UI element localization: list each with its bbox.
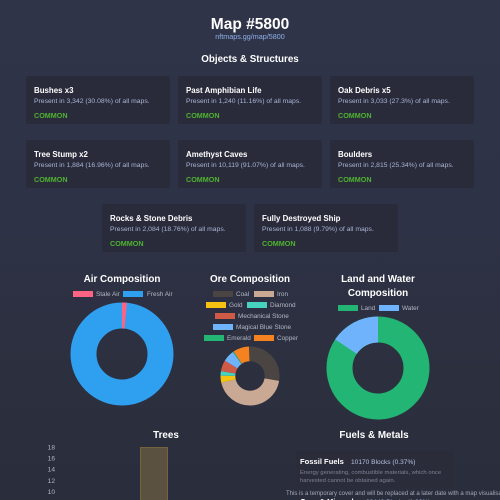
card: rocks and stone debris: Present in 2,084 (18.76%) of all maps. <box>110 226 226 232</box>
ore legend: Coal <box>236 291 249 298</box>
card: past amphibian life: COMMON <box>186 110 220 120</box>
ore legend: Emerald <box>227 335 251 342</box>
card: boulders: Boulders <box>338 150 372 159</box>
card: bushes: Present in 3,342 (30.08%) of all maps. <box>34 98 150 104</box>
fossil fuels description: harvested cannot be obtained again. <box>300 478 395 484</box>
card: amethyst caves: COMMON <box>186 174 220 184</box>
card: amethyst caves: Present in 10,119 (91.07%) of all maps. <box>186 162 305 168</box>
heading: ore composition: Ore Composition <box>210 274 290 285</box>
ore legend <box>204 291 299 342</box>
card: past amphibian life: Present in 1,240 (11.16%) of all maps. <box>186 98 301 104</box>
card: boulders <box>330 140 474 188</box>
fossil fuels description <box>300 470 441 484</box>
heading: air composition: Air Composition <box>84 274 160 285</box>
card: bushes <box>26 76 170 124</box>
card: oak debris: Oak Debris x5 <box>338 86 391 95</box>
y axis labels: 12 <box>48 478 55 485</box>
fossil fuels amount: 10170 Blocks (0.37%) <box>351 458 416 466</box>
card: rocks and stone debris: Rocks & Stone Debris <box>110 214 192 223</box>
fossil fuels name: Fossil Fuels <box>300 457 344 466</box>
land and water legend: Land <box>361 305 376 312</box>
card: bushes: COMMON <box>34 110 68 120</box>
y axis labels <box>48 444 55 496</box>
ore legend: Copper <box>277 335 299 342</box>
ore legend: Diamond <box>270 302 296 309</box>
card: boulders: Present in 2,815 (25.34%) of all maps. <box>338 162 454 168</box>
ore legend: Mechanical Stone <box>238 313 289 320</box>
fossil fuels description: Energy generating, combustible materials, which once <box>300 470 441 476</box>
trees bar chart <box>48 444 168 500</box>
card: fully destroyed ship: Present in 1,088 (9.79%) of all maps. <box>262 226 374 232</box>
card: boulders: COMMON <box>338 174 372 184</box>
card: fully destroyed ship: COMMON <box>262 238 296 248</box>
title: Map #5800 <box>211 16 289 32</box>
y axis labels: 18 <box>48 444 55 452</box>
card: oak debris: Present in 3,033 (27.3%) of all maps. <box>338 98 450 104</box>
land and water donut chart <box>340 330 416 406</box>
heading: fuels and metals: Fuels & Metals <box>339 430 409 441</box>
tree bar <box>140 448 168 500</box>
heading: trees: Trees <box>153 430 179 441</box>
heading: land and water composition: Land and Water <box>341 274 415 285</box>
heading: land and water composition: Composition <box>348 288 408 299</box>
ore legend: Gold <box>229 302 243 309</box>
card: tree stump <box>26 140 170 188</box>
map link: nftmaps.gg/map/5800 <box>215 32 285 41</box>
panel: fossil fuels <box>296 451 454 488</box>
card: oak debris: COMMON <box>338 110 372 120</box>
card: past amphibian life: Past Amphibian Life <box>186 86 262 95</box>
heading: objects and structures: Objects & Structures <box>201 54 299 65</box>
heading: land and water composition <box>341 274 415 299</box>
card: rocks and stone debris: COMMON <box>110 238 144 248</box>
y axis labels: 10 <box>48 489 55 496</box>
land and water legend: Water <box>402 305 420 312</box>
card: fully destroyed ship: Fully Destroyed Ship <box>262 214 340 223</box>
air donut chart <box>84 316 160 392</box>
ore legend: Magical Blue Stone <box>236 324 292 331</box>
card: past amphibian life <box>178 76 322 124</box>
card: amethyst caves: Amethyst Caves <box>186 150 247 159</box>
card: oak debris <box>330 76 474 124</box>
card: tree stump: COMMON <box>34 174 68 184</box>
card: tree stump: Tree Stump x2 <box>34 150 88 159</box>
land and water legend <box>338 305 420 312</box>
y axis labels: 16 <box>48 456 55 462</box>
air legend <box>73 291 173 298</box>
card: rocks and stone debris <box>102 204 246 252</box>
y axis labels: 14 <box>48 466 55 474</box>
air legend: Stale Air <box>96 291 121 298</box>
ore donut chart <box>228 354 272 398</box>
air legend: Fresh Air <box>147 291 173 298</box>
card: fully destroyed ship <box>254 204 398 252</box>
card: bushes: Bushes x3 <box>34 86 73 95</box>
card: amethyst caves <box>178 140 322 188</box>
card: tree stump: Present in 1,884 (16.96%) of all maps. <box>34 162 150 168</box>
ore legend: Iron <box>277 291 288 298</box>
